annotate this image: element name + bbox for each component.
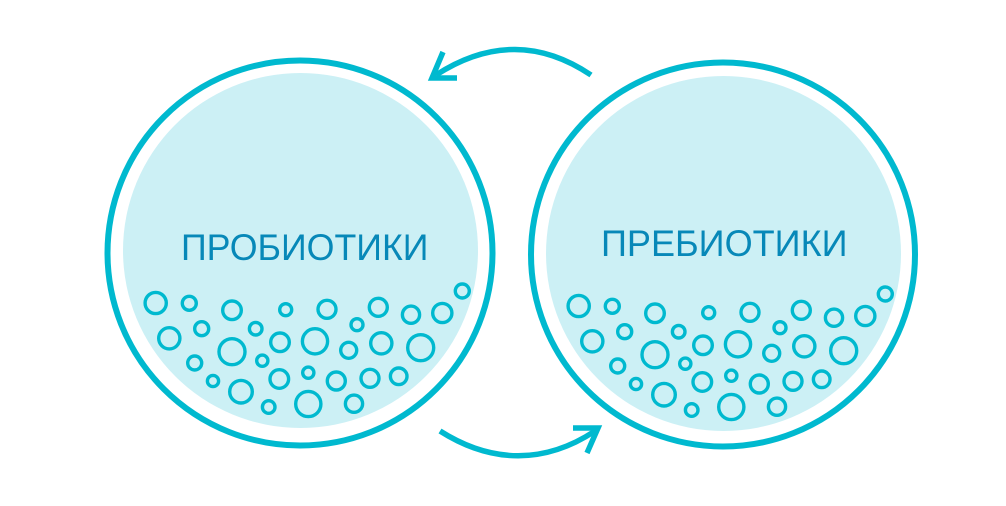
panel: prebiotics circle: [531, 62, 915, 446]
inner fill: prebiotics: [546, 76, 901, 431]
bubbles: probiotics: [145, 284, 469, 417]
arrow: top, right to left: [432, 49, 591, 78]
arrow: bottom, left to right: [440, 428, 598, 456]
label: probiotics: ПРОБИОТИКИ: [181, 227, 428, 268]
inner fill: probiotics: [123, 73, 478, 428]
outer ring: prebiotics: [531, 62, 915, 446]
bubbles: prebiotics: [568, 287, 892, 420]
outer ring: probiotics: [108, 60, 492, 446]
panel: probiotics circle: [108, 60, 492, 446]
label: prebiotics: ПРЕБИОТИКИ: [601, 223, 848, 264]
